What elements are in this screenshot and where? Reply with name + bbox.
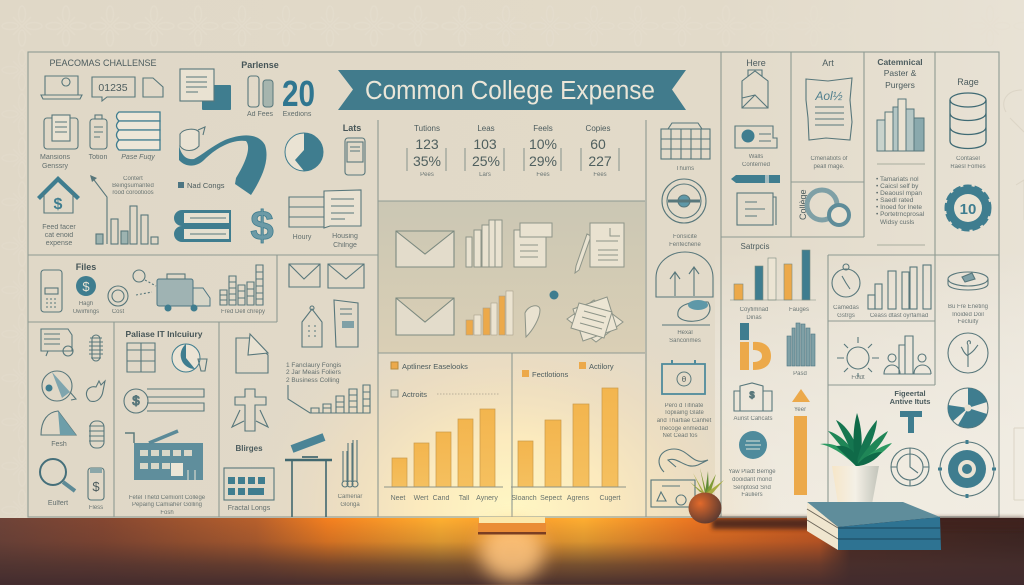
caption: walls: Walls (749, 154, 763, 160)
icon: coil two (89, 421, 104, 448)
leaves (820, 413, 892, 466)
caption: contasel (950, 156, 986, 170)
captions: satrpcis: Coyfimnad (740, 307, 768, 313)
divider top (877, 163, 925, 165)
list: bullets: • Inoed for Inete (876, 204, 922, 211)
white pot plant (820, 413, 892, 504)
decorative top pattern (0, 4, 1024, 48)
panel: lower right icons (890, 272, 996, 498)
icon: envelope two (328, 264, 364, 288)
caption: machine: Fosh (160, 510, 174, 516)
list: bullets: • Deaousl mpan (876, 190, 922, 197)
captions: left column (48, 500, 103, 511)
text: content note: Beingsumanted (112, 183, 154, 189)
stat column: copies: Copies (586, 124, 610, 133)
axis (511, 486, 626, 488)
captions: housing (293, 233, 358, 249)
lamp bar (478, 517, 546, 534)
icon: phone (345, 138, 365, 175)
captions: satrpcis: Dinas (746, 315, 762, 321)
icon: clipboard (44, 115, 78, 149)
caption: thums: Thums (676, 166, 694, 172)
panel: palisade inventory (124, 329, 207, 516)
stat column: fees: Fees (536, 172, 550, 178)
badge: 10 (946, 186, 990, 230)
panel: personal challenge (37, 58, 365, 249)
icon: pen (575, 234, 591, 273)
caption: pasd: Pasd (793, 371, 807, 377)
stat column: tuitions: 123 (415, 136, 439, 152)
legend: fectlotions: Fectlotions (532, 370, 569, 379)
caption: tubes: Cameriar (338, 494, 362, 500)
icon: dollar coin: $ (82, 279, 90, 294)
label: nad congs: Nad Congs (187, 181, 225, 190)
icon: people with bars (884, 336, 931, 374)
axis labels: Aynery (476, 495, 498, 502)
stat column: fees (524, 124, 561, 178)
text: content note: Contert (123, 176, 143, 182)
icon: letter T (900, 411, 922, 433)
icon: calendar grid (661, 123, 710, 159)
light reflection on table (480, 523, 544, 581)
panel: mail and tags (286, 264, 370, 413)
panel: catemnical (876, 57, 925, 245)
icon: delivery truck (157, 274, 210, 312)
title banner: Common College Expense (365, 77, 655, 105)
axis labels: Cugert (599, 495, 621, 502)
captions: satrpcis: Fauges (789, 307, 809, 313)
panel: files (41, 262, 265, 315)
bars (392, 409, 495, 487)
list: bullets: • Portetrncprosal (876, 211, 925, 218)
stat column: copies: 60 (590, 136, 606, 152)
caption: food facer: cat enoid (45, 232, 73, 239)
icon: dollar coin (76, 276, 96, 296)
icon: receipt document (334, 300, 358, 347)
arrow: orange upward: Yeer (794, 407, 806, 413)
caption: disk (948, 304, 988, 325)
list: bullets: • Caicsl self by (876, 183, 919, 190)
pot (688, 492, 722, 524)
text: bullet notes: Inecoge enmedad (660, 426, 708, 432)
stat column: copies: 227 (588, 153, 612, 169)
icon: arch with arrows (656, 252, 713, 297)
icon: rings (807, 190, 849, 225)
captions: stopwatch: Camedas (833, 305, 859, 311)
captions under icons (40, 154, 155, 170)
pie chart (285, 133, 323, 171)
icon: paper with roll (514, 223, 552, 267)
axis labels: Agrens (567, 495, 590, 502)
caption: walls (742, 154, 770, 168)
stat column: tuitions: Pees (420, 172, 434, 178)
icon: envelope top (396, 231, 454, 267)
icon: price tag (302, 306, 322, 347)
stat column: copies: Fees (593, 172, 607, 178)
icon: number bubble: 01235 (98, 82, 128, 94)
axis labels: Tall (459, 495, 470, 502)
caption: art (810, 156, 848, 170)
icon: coin with bars (124, 389, 204, 413)
numbered list: 1 Fanclaury Fongis (286, 362, 342, 369)
axis labels: Neet (391, 495, 405, 502)
captions: stopwatch: Gstrgs (837, 313, 855, 319)
icon: table grid (127, 343, 155, 372)
icon: database (950, 93, 986, 148)
heading: catemnical (877, 57, 923, 90)
caption: fresh: Fesh (51, 441, 67, 448)
stat column: copies (581, 124, 619, 178)
icon: ledger with open document (289, 190, 361, 228)
dot marker (550, 290, 558, 300)
icon: house with dollar: $ (54, 196, 63, 213)
icon: dollar jar (88, 468, 104, 500)
panel: art (798, 58, 852, 225)
caption: tubes (338, 494, 362, 508)
icon: calculator phone (41, 270, 62, 312)
icon: target ring (662, 179, 706, 223)
captions: satrpcis (740, 307, 809, 321)
wooden table (0, 518, 1024, 585)
captions under icons: Totion (89, 154, 107, 161)
faint right wall icons (1004, 90, 1024, 500)
icon: dollar sign: $ (250, 202, 274, 249)
panel: stopwatch and sun (832, 264, 931, 381)
heading: palisade inventory: Paliase IT Inlcuiury (125, 329, 203, 339)
icon: tubes (342, 440, 358, 487)
stat column: fees: Feels (533, 124, 553, 133)
icon: teal books (174, 210, 231, 242)
stat column: tuitions (407, 124, 446, 178)
icon: folder (143, 78, 163, 97)
stat column: leas: 25% (472, 153, 500, 169)
dark shadow strip at wall base (712, 518, 1024, 529)
numbered list: 2 Business Colling (286, 377, 340, 384)
icon: telescope on table (285, 437, 332, 517)
rotated label: college: Collège (798, 189, 808, 220)
icon: warning box (651, 480, 695, 507)
panel grid lines (28, 52, 999, 517)
icon: document top right (590, 223, 624, 267)
icon: monitor (41, 329, 73, 356)
pot (832, 466, 879, 504)
caption: walls: Conterned (742, 162, 770, 168)
captions: left column: Fless (89, 505, 103, 511)
caption: machine: Fetel Thetd Cemiont Collége (129, 495, 206, 501)
heading: here: Here (746, 58, 766, 68)
icon: teal disc (739, 431, 767, 459)
icon: dome (41, 411, 76, 435)
icon: teal machine (125, 431, 203, 480)
bar chart: small (96, 206, 158, 244)
icon: spiral coin (108, 286, 128, 306)
icon: coil one (89, 335, 103, 361)
arrow: rising (90, 175, 107, 244)
heading: rage: Rage (957, 77, 979, 87)
chart: stacked rising (288, 385, 370, 413)
caption: fractal longs: Fractal Longs (228, 505, 271, 512)
heading: figeertal: Antive Ituts (890, 397, 930, 406)
heading: blirges: Blirges (235, 444, 263, 453)
numbered list (286, 362, 342, 384)
caption: fonsicite: Fonsicite (673, 234, 698, 240)
sage panel background (378, 201, 645, 353)
icon: book with dollar: $ (749, 390, 755, 400)
stat column: leas: 103 (473, 136, 497, 152)
panel: left icon column (40, 329, 105, 511)
icon: sun (837, 337, 879, 377)
text: bullet notes: Topiiaing Glate (664, 410, 705, 416)
heading: figeertal (890, 389, 930, 406)
icon: folded document (236, 334, 268, 373)
caption: disk: Bu Fre Eneting (948, 304, 988, 310)
icon: envelope one (289, 264, 320, 287)
icon: calendar (224, 468, 274, 500)
captions: left column: Eulfert (48, 500, 68, 507)
numbered list: 2 Jar Meais Foliers (286, 369, 342, 376)
icon: bar bundle (787, 323, 815, 366)
bar chart: teal (877, 99, 924, 151)
caption: yaw plant: Yaw Pladt Bemge (728, 469, 776, 475)
legend: aptlinesr: Aptlinesr Easelooks (402, 362, 468, 371)
captions under icons: Genssry (42, 163, 69, 170)
stat column: tuitions: Tutions (414, 124, 440, 133)
icon: disk (948, 272, 988, 290)
text: bullet notes (657, 403, 712, 439)
list: bullets: Widsy cusls (880, 219, 915, 226)
caption: foldt: Foldt (851, 375, 865, 381)
caption: contasel: Raesl Fomes (950, 164, 986, 170)
pie chart with cup (172, 344, 207, 372)
bar chart: mixed (730, 250, 816, 300)
caption: hexal: Hexal (677, 330, 693, 336)
stat column: leas (465, 124, 504, 178)
caption: food facer: Feed facer (42, 224, 76, 231)
heading: lats: Lats (343, 123, 361, 133)
lamp glow on wall (242, 300, 782, 585)
caption: food facer: expense (46, 240, 72, 247)
icon: squiggle arrow (659, 449, 708, 472)
icon: id card (735, 126, 777, 148)
chart: left orange bars (384, 362, 503, 502)
legend: actilory: Actilory (589, 362, 614, 371)
icon: teal calendar: θ (682, 375, 687, 384)
axis labels: Sloanch (511, 495, 537, 502)
bars: mixed orange (466, 291, 513, 335)
text: content note (112, 176, 154, 196)
icon: dollar jar: $ (92, 479, 100, 494)
caption: yaw plant: dooidant mond (732, 477, 772, 483)
icon: pin (525, 306, 540, 337)
stat column: fees: 10% (529, 136, 557, 152)
caption: exedions: Exedions (283, 111, 312, 118)
caption: yaw plant: Fauliers (741, 492, 763, 498)
caption: hexal: Sanconmes (669, 338, 701, 344)
icon: magnifier (40, 459, 75, 491)
caption: yaw plant: Senptosd Snd (733, 485, 771, 491)
list: bullets (876, 176, 925, 226)
icon: scattered papers (567, 297, 623, 342)
icon: tree circle (948, 333, 988, 373)
icon: blob (86, 381, 105, 401)
caption: food facer (42, 224, 76, 247)
icon: parchment (806, 78, 852, 140)
caption: disk: Inoided Doil (952, 312, 984, 318)
bars (518, 388, 618, 487)
caption: hexal (669, 330, 701, 344)
axis (384, 486, 503, 488)
caption: contasel: Contasel (956, 156, 980, 162)
icon: dish (662, 300, 710, 325)
icon: small badge (133, 270, 156, 295)
icon: envelope bottom (396, 298, 454, 335)
caption: aurist: Aurist Cahcats (733, 416, 773, 422)
heading: satrpcis: Satrpcis (741, 242, 769, 251)
panel: stats table (407, 124, 619, 178)
caption: stacked chart: Fred Dell chrepy (221, 309, 265, 315)
captions: stopwatch (833, 305, 928, 319)
bars: top (466, 220, 502, 267)
icon: cross with arrows (232, 389, 268, 431)
text: bullet notes: Net Cead fos (662, 433, 698, 439)
caption: machine: Pepaing Camiaher Gölling (132, 502, 202, 508)
caption: fonsicite (669, 234, 702, 248)
panel: documents and telescope (224, 334, 362, 517)
heading: catemnical: Purgers (885, 80, 915, 90)
icon: clock (891, 448, 929, 486)
icon: bottle (90, 115, 107, 149)
legend: actroits: Actroits (402, 390, 427, 399)
caption: fonsicite: Fenfechene (669, 242, 702, 248)
icon: teal calendar (662, 360, 705, 394)
decorative left margin pattern (0, 48, 26, 518)
bar chart: stacked (220, 265, 263, 305)
wall light at lower right (715, 250, 1024, 520)
axis labels (391, 495, 498, 502)
panel: rage (946, 77, 990, 230)
axis labels: Wert (414, 495, 428, 502)
icon: teal ribbon (179, 127, 267, 195)
icon: number bubble (92, 77, 135, 101)
heading: personal challenge: PEACOMAS CHALLENSE (49, 58, 157, 68)
icon: pencil (731, 175, 780, 183)
icon: laptop (41, 76, 82, 99)
caption: art: Cmenatiots of (810, 156, 848, 162)
stacked books (807, 502, 941, 550)
icon: coin with bars: $ (132, 393, 140, 408)
axis labels: Cand (433, 495, 449, 502)
stat column: leas: Leas (477, 124, 495, 133)
icon: parchment: Aol½ (814, 89, 843, 103)
badge: 10: 10 (960, 201, 976, 218)
stat column: leas: Lars (479, 172, 491, 178)
captions: housing: Houry (293, 234, 312, 241)
icon: bag envelope (742, 70, 768, 108)
heading: catemnical: Paster & (884, 68, 917, 78)
axis labels: Sepect (540, 495, 562, 502)
terracotta plant (688, 468, 724, 524)
captions: housing: Chilnge (333, 242, 357, 249)
big number 20: 20 (282, 73, 315, 114)
captions: housing: Housing (332, 233, 358, 240)
caption: yaw plant (728, 469, 776, 498)
panel: here column (731, 58, 780, 225)
list: bullets: • Saedl rated (876, 197, 914, 204)
captions under icons: Pase Fuqy (121, 154, 155, 161)
caption: machine (129, 495, 206, 516)
icon: book with dollar (734, 383, 772, 411)
title banner (338, 70, 686, 110)
leaves (690, 468, 724, 495)
heading: parlense: Parlense (241, 60, 279, 70)
caption: tubes: Gloriga (340, 502, 360, 508)
stat column: tuitions: 35% (413, 153, 441, 169)
panel: sage icon row (396, 220, 624, 342)
heading: catemnical: Catemnical (877, 57, 923, 67)
icon: cans (248, 76, 273, 107)
text: bullet notes: and Thartiae Canhet (657, 418, 712, 424)
captions: stopwatch: Ceass dtast oyrfamad (870, 313, 928, 319)
caption: art: peall mage. (813, 164, 845, 170)
panel: narrow icon column (651, 123, 713, 507)
captions: files: Cost (112, 309, 124, 315)
text: bullet notes: Pero d Tifinate (665, 403, 704, 409)
caption: fees: Ad Fees (247, 111, 274, 118)
icon: letter b (740, 323, 771, 370)
stat column: fees: 29% (529, 153, 557, 169)
icon: globe (42, 371, 76, 401)
chart: right orange bars (511, 362, 626, 502)
captions: files: Uwirhings (73, 309, 99, 315)
arrow: orange upward (792, 389, 810, 495)
text: content note: rood corootioos (112, 190, 154, 196)
captions: files (73, 301, 124, 315)
panel: satrpcis (728, 242, 816, 498)
captions under icons: Mansions (40, 154, 70, 161)
icon: stacked books (116, 112, 160, 150)
icon: stopwatch (832, 264, 860, 297)
divider bottom (877, 244, 925, 246)
icon: target (938, 440, 996, 498)
axis labels (511, 495, 621, 502)
captions: files: Hagh (79, 301, 93, 307)
bar chart: outline (868, 265, 931, 309)
caption: disk: Fecluity (958, 319, 978, 325)
heading: files: Files (76, 262, 96, 272)
list: bullets: • Tamariats nol (876, 176, 919, 183)
icon: house with dollar (37, 176, 80, 213)
icon: doc stack (737, 193, 776, 225)
icon: document with teal box (180, 69, 231, 110)
heading: figeertal: Figeertal (894, 389, 926, 398)
icon: segmented wheel (948, 388, 988, 428)
heading: art: Art (822, 58, 834, 68)
